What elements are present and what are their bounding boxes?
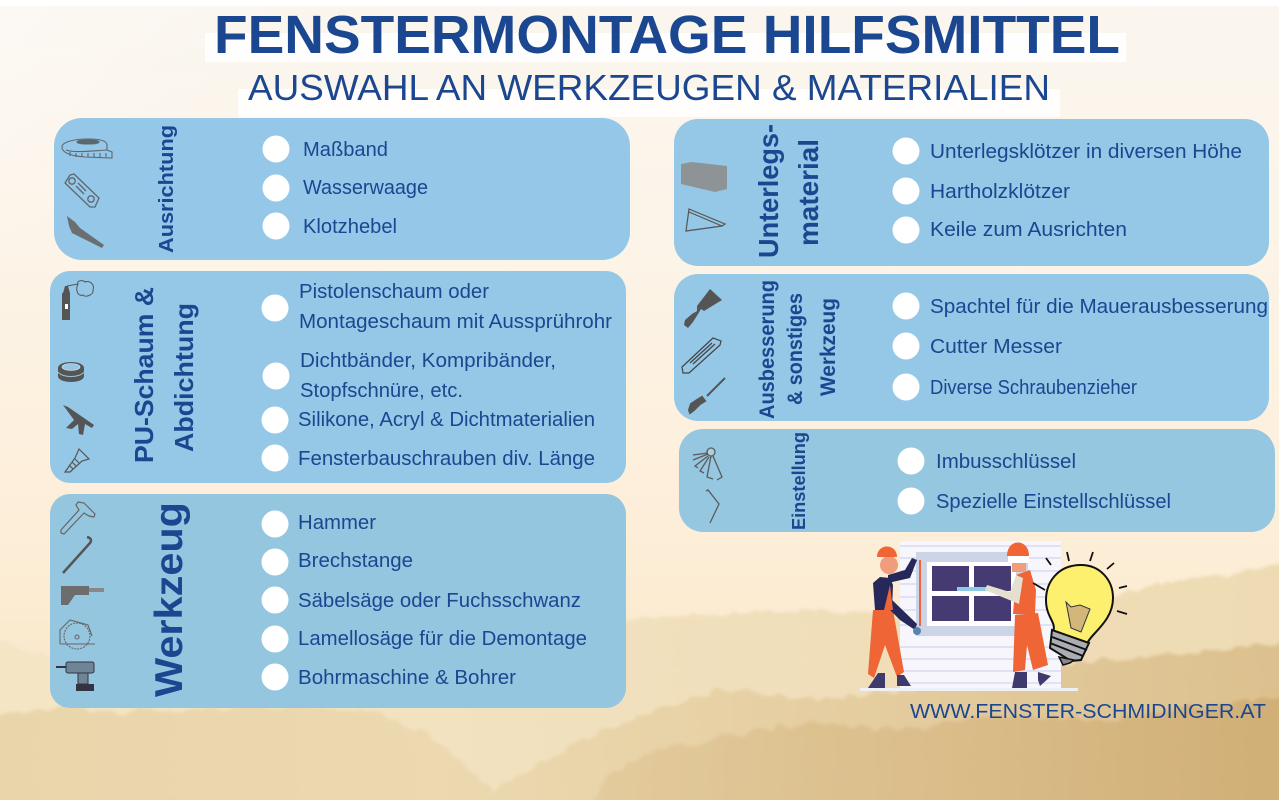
icon: cutter knife [682, 338, 721, 373]
title: FENSTERMONTAGE HILFSMITTEL [214, 5, 1120, 65]
list: Ausrichtung [262, 136, 428, 240]
icon: screwdriver [689, 378, 725, 413]
icon: caulking gun [63, 405, 94, 435]
list: PU-Schaum [262, 281, 612, 472]
icon: tape measure [62, 139, 112, 158]
list: Unterlegsmaterial: Keile zum Ausrichten [930, 219, 1127, 241]
icon: hex key set [693, 448, 722, 480]
icon: cordless drill [56, 662, 94, 691]
list: Ausbesserung: Cutter Messer [930, 336, 1062, 358]
list: Ausrichtung: Klotzhebel [303, 216, 397, 238]
list: Unterlegsmaterial: Unterlegsklötzer in diversen Höhe [930, 141, 1242, 163]
icon: crowbar [63, 537, 91, 573]
heading: Unterlegs- [753, 124, 784, 258]
heading: Werkzeug [148, 502, 191, 697]
icon: hex key [706, 490, 719, 523]
worker right [985, 542, 1051, 688]
panel: Ausbesserung: Werkzeug [817, 298, 840, 396]
icon: spatula [684, 289, 722, 328]
icon: wedge [686, 209, 725, 231]
icon: saber saw [61, 586, 104, 605]
panel: Ausrichtung [54, 118, 630, 260]
list: Werkzeug: Bohrmaschine & Bohrer [298, 667, 516, 689]
house wall [860, 541, 1078, 691]
list: Ausrichtung: Wasserwaage [303, 177, 428, 199]
list: PU-Schaum: Montageschaum mit Aussprührohr [299, 311, 612, 333]
list: Werkzeug: Hammer [298, 512, 376, 534]
list: Ausbesserung: Spachtel für die Mauerausbesserung [930, 296, 1268, 318]
list: Unterlegsmaterial: Hartholzklötzer [930, 181, 1070, 203]
panel: PU-Schaum & Abdichtung: Abdichtung [169, 303, 199, 452]
panel: Unterlegsmaterial [674, 119, 1269, 266]
panel: Einstellung [679, 429, 1275, 532]
list: PU-Schaum: Silikone, Acryl & Dichtmaterialien [298, 409, 595, 431]
illustration: window fitters [860, 541, 1127, 691]
list: Ausbesserung [892, 292, 1268, 400]
worker left [868, 546, 921, 688]
heading: Ausrichtung [156, 125, 178, 253]
panel: Unterlegsmaterial: material [793, 139, 824, 246]
icon: screw [65, 449, 89, 472]
list: PU-Schaum: Pistolenschaum oder [299, 281, 489, 303]
panel: Ausbesserung [674, 274, 1269, 421]
list: Werkzeug [262, 510, 587, 690]
icon: foam can [62, 281, 93, 320]
panel: Werkzeug [50, 494, 626, 708]
list: Ausbesserung: Diverse Schraubenzieher [930, 377, 1137, 399]
icon: block [681, 162, 727, 192]
list: Unterlegsmaterial [892, 138, 1242, 244]
heading: Ausbesserung [756, 280, 779, 419]
subtitle: AUSWAHL AN WERKZEUGEN & MATERIALIEN [248, 67, 1050, 108]
heading: PU-Schaum & [129, 287, 159, 463]
website url: WWW.FENSTER-SCHMIDINGER.AT [910, 701, 1266, 723]
list: Einstellung: Spezielle Einstellschlüssel [936, 491, 1171, 513]
panel: Ausbesserung: & sonstiges [784, 293, 807, 405]
list: Werkzeug: Brechstange [298, 550, 413, 572]
heading: Einstellung [789, 432, 809, 530]
list: Einstellung [898, 448, 1171, 514]
list: Werkzeug: Lamellosäge für die Demontage [298, 628, 587, 650]
icon: wedge lever [67, 216, 104, 248]
list: PU-Schaum: Dichtbänder, Kompribänder, [300, 350, 556, 372]
icon: spirit level [65, 174, 99, 207]
icon: circular saw [60, 620, 95, 649]
window [916, 552, 1028, 636]
list: PU-Schaum: Fensterbauschrauben div. Länge [298, 448, 595, 470]
panel: PU-Schaum & Abdichtung [50, 271, 626, 483]
icon: light bulb [1033, 552, 1127, 665]
icon: hammer [61, 502, 95, 534]
list: Einstellung: Imbusschlüssel [936, 451, 1076, 473]
list: Ausrichtung: Maßband [303, 139, 388, 161]
icon: sealing tape roll [58, 362, 84, 382]
list: Werkzeug: Säbelsäge oder Fuchsschwanz [298, 590, 581, 612]
list: PU-Schaum: Stopfschnüre, etc. [300, 380, 463, 402]
